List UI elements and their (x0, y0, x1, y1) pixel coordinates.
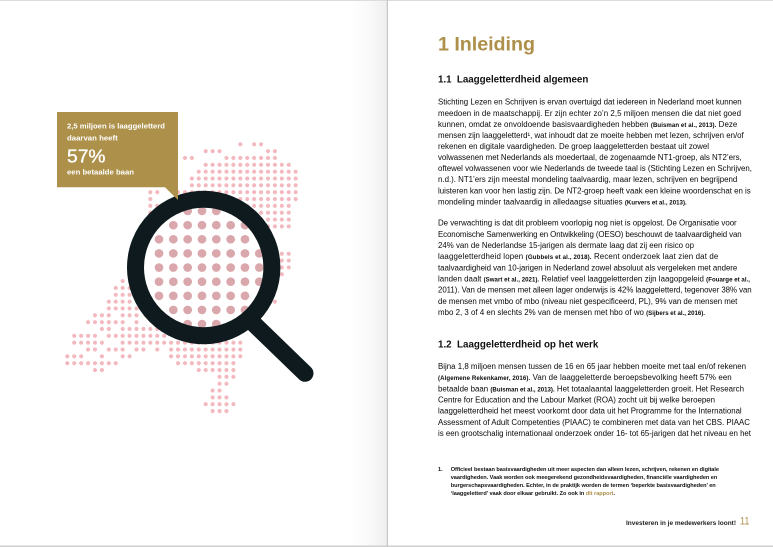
dotted map of the Netherlands (67, 144, 296, 411)
paragraph: expectation: 2011). Van de mensen met alleen lager onderwijs is 42% laaggeletterd, tegenover 38% van (438, 286, 752, 295)
paragraph: literacy at work: betaalde baan (Buisman et al., 2013). Het totaalaantal laaggeletterden groeit. Het Research (438, 384, 744, 393)
footnote: vaardigheden. Vaak worden ook meegerekend gezondheidsvaardigheden, financiële vaardigheden en (451, 475, 718, 481)
footnote: 1. (438, 467, 443, 473)
paragraph: literacy in general: Stichting Lezen en Schrijven is ervan overtuigd dat iedereen in Nederland moet kunnen (438, 98, 742, 107)
paragraph: literacy in general: rekenen en digitale vaardigheden. De groep laaggeletterden bestaat uit zowel (438, 142, 709, 151)
title: 1 Inleiding (438, 34, 535, 56)
statistic: 57%: 57% (67, 145, 106, 166)
footer: running title and page number: Investeren in je medewerkers loont! (626, 520, 736, 527)
callout: 57% paid job: 2,5 miljoen is laaggeletterd (67, 121, 165, 130)
callout: 57% paid job: daarvan heeft (67, 134, 118, 142)
footnote: burgerschapsvaardigheden. Echter, in de praktijk worden de termen ‘beperkte basisvaardigheden’ en (451, 483, 716, 489)
paragraph: expectation (438, 219, 752, 317)
callout: 57% paid job: een betaalde baan (67, 167, 134, 176)
footnote (438, 467, 719, 497)
icon: magnifying glass (136, 199, 305, 373)
paragraph: literacy in general: meedoen in de maatschappij. Er zijn echter zo’n 2,5 miljoen mensen die dat niet goed (438, 109, 741, 118)
paragraph: literacy at work (438, 362, 752, 438)
paragraph: literacy at work: Centre for Education and the Labour Market (ROA) zocht uit bij welke beroepen (438, 396, 715, 404)
paragraph: expectation: taalvaardigheid van 10-jarigen in Nederland zowel absoluut als vergeleken met andere (438, 263, 738, 272)
paragraph: literacy at work: is een grootschalig internationaal onderzoek onder 16- tot 65-jarigen dat het niveau en het (438, 429, 752, 438)
paragraph: literacy at work: Assessment of Adult Competenties (PIAAC) te combineren met data van het CBS. PIAAC (438, 418, 750, 427)
paragraph: expectation: de mensen met vmbo of mbo (niveau niet gespecificeerd, PL), 9% van de mensen met (438, 297, 738, 306)
paragraph: expectation: laaggeletterdheid lopen (Gubbels et al., 2018). Recent onderzoek laat zien dat de (438, 252, 719, 261)
paragraph: literacy in general: luisteren kan voor hen lastig zijn. De NT2-groep heeft vaak een kleine woordenschat en is (438, 186, 751, 195)
heading 1.2: 1.2 Laaggeletterdheid op het werk (438, 340, 599, 351)
paragraph: literacy in general: oftewel volwassenen voor wie Nederlands de tweede taal is (Stichting Lezen en Schrijven, (438, 164, 752, 173)
paragraph: literacy at work: (Algemene Rekenkamer, 2016). Van de laaggeletterde beroepsbevolking heeft 57% een (438, 373, 732, 382)
paragraph: expectation: 24% van de Nederlandse 15-jarigen als dermate laag dat zij een risico op (438, 241, 695, 250)
page number: 11 (740, 516, 749, 528)
paragraph: literacy in general: n.d.). NT1’ers zijn meestal mondeling taalvaardig, maar lezen, schrijven en begrijpend (438, 175, 737, 184)
paragraph: literacy in general: mondeling minder taalvaardig in alledaagse situaties (Kurvers et al., 2013). (438, 197, 687, 206)
paragraph: literacy at work: Bijna 1,8 miljoen mensen tussen de 16 en 65 jaar hebben moeite met taal en/of rekenen (438, 362, 746, 371)
paragraph: literacy in general: volwassenen met Nederlands als moedertaal, de zogenaamde NT1-groep, als NT2’ers, (438, 153, 742, 162)
paragraph: literacy at work: laaggeletterdheid het meest voorkomt door data uit het Programme for the International (438, 407, 742, 416)
paragraph: literacy in general: mensen zijn laaggeletterd¹, wat inhoudt dat ze moeite hebben met lezen, schrijven en/of (438, 131, 744, 140)
paragraph: expectation: Economische Samenwerking en Ontwikkeling (OESO) beschouwt de taalvaardigheid van (438, 230, 742, 239)
paragraph: literacy in general (438, 98, 752, 206)
footnote: ‘laaggeletterd’ vaak door elkaar gebruikt. Zo ook in dit rapport. (451, 491, 615, 497)
paragraph: literacy in general: kunnen, omdat ze onvoldoende basisvaardigheden hebben (Buisman et al., 2013). Deze (438, 120, 738, 129)
callout: 57% paid job (57, 112, 178, 200)
footer: running title and page number (626, 516, 749, 528)
paragraph: expectation: De verwachting is dat dit probleem voorlopig nog niet is opgelost. De Organisatie voor (438, 219, 737, 228)
footnote: Officieel bestaan basisvaardigheden uit meer aspecten dan alleen lezen, schrijven, rekenen en digitale (451, 467, 719, 473)
paragraph: expectation: landen daalt (Swart et al., 2021). Relatief veel laaggeletterden zijn laagopgeleid (Fouarge et al., (438, 274, 750, 284)
enlarged map dots inside lens (159, 211, 261, 324)
heading 1.1: 1.1 Laaggeletterdheid algemeen (438, 75, 588, 86)
paragraph: expectation: mbo 2, 3 of 4 en slechts 2% van de mensen met hbo of wo (Sijbers et al., 2016). (438, 308, 705, 317)
